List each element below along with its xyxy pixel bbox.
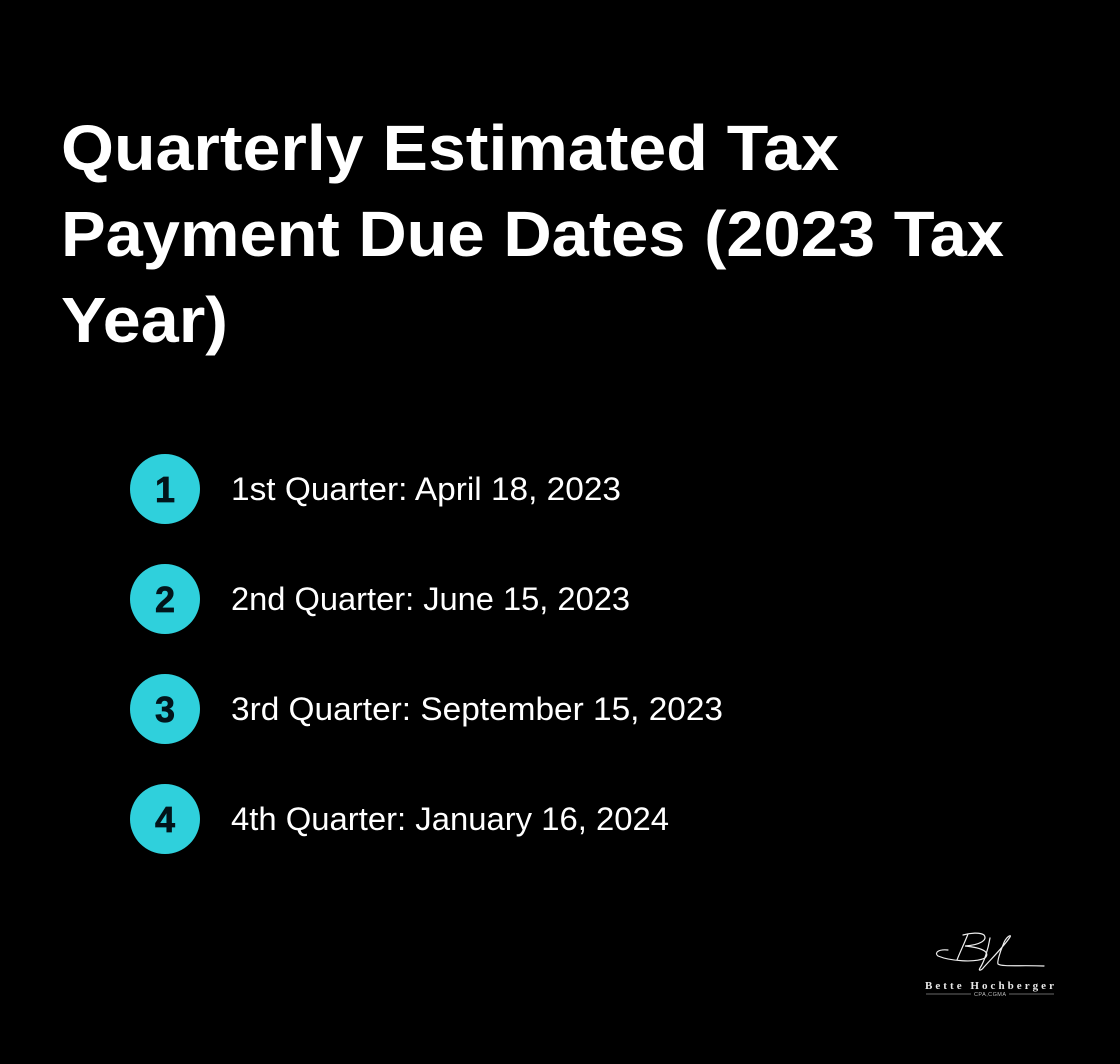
item 1: 1st quarter: 1st Quarter: April 18, 2023 xyxy=(231,471,621,507)
logo: Bette Hochberger signature xyxy=(925,933,1054,998)
credentials: CPA,CGMA xyxy=(974,992,1006,998)
brand name: Bette Hochberger xyxy=(925,980,1054,992)
title xyxy=(61,112,1004,356)
item 2: 2nd quarter xyxy=(130,564,630,634)
list of quarterly due dates xyxy=(130,454,723,854)
icon: BH signature xyxy=(936,933,1044,970)
item 3: 3rd quarter: 3rd Quarter: September 15, 2023 xyxy=(231,691,723,727)
item 1: 1st quarter: 1 xyxy=(155,469,175,510)
item 3: 3rd quarter: 3 xyxy=(155,689,175,730)
item 3: 3rd quarter xyxy=(130,674,723,744)
item 4: 4th quarter: 4 xyxy=(155,799,175,840)
item 4: 4th quarter xyxy=(130,784,669,854)
item 2: 2nd quarter: 2nd Quarter: June 15, 2023 xyxy=(231,581,630,617)
item 1: 1st quarter xyxy=(130,454,621,524)
item 4: 4th quarter: 4th Quarter: January 16, 2024 xyxy=(231,801,669,837)
title: Payment Due Dates (2023 Tax xyxy=(61,198,1004,270)
title: Year) xyxy=(61,284,228,356)
item 2: 2nd quarter: 2 xyxy=(155,579,175,620)
title: Quarterly Estimated Tax xyxy=(61,112,839,184)
